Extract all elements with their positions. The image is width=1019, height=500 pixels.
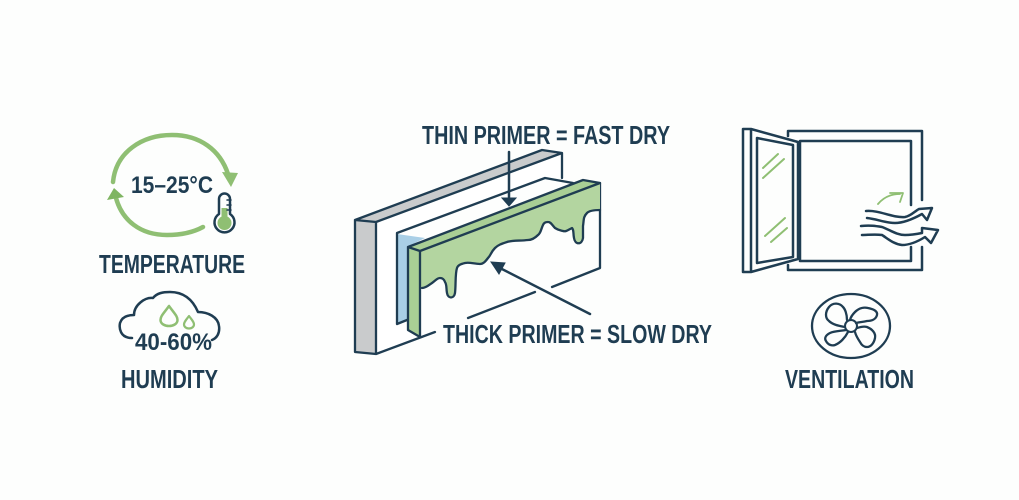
icon: water drops — [160, 306, 194, 328]
icon: open window — [743, 129, 922, 272]
icon: airflow arrows — [861, 208, 938, 245]
panel: temperature — [99, 135, 245, 279]
panel: ventilation — [743, 129, 938, 394]
icon: cycle arrows — [107, 135, 238, 235]
primer coat with drips — [408, 180, 600, 337]
panel: primer thickness diagram — [355, 120, 712, 354]
label: thin primer: THIN PRIMER = FAST DRY — [422, 120, 670, 150]
label: thick primer: THICK PRIMER = SLOW DRY — [443, 319, 712, 349]
icon: cloud — [120, 292, 219, 340]
icon: green airflow arrow — [878, 193, 903, 204]
humidity range: 40-60% — [135, 329, 212, 356]
temperature range: 15–25°C — [131, 172, 213, 199]
arrow: thin primer — [502, 152, 516, 206]
arrow: thick primer — [491, 262, 590, 314]
wall layers — [355, 150, 600, 354]
heading: temperature: TEMPERATURE — [99, 249, 245, 279]
icon: fan — [812, 294, 890, 358]
heading: humidity: HUMIDITY — [121, 364, 218, 394]
panel: humidity — [120, 292, 219, 394]
heading: ventilation: VENTILATION — [785, 364, 914, 394]
icon: thermometer — [214, 194, 234, 232]
